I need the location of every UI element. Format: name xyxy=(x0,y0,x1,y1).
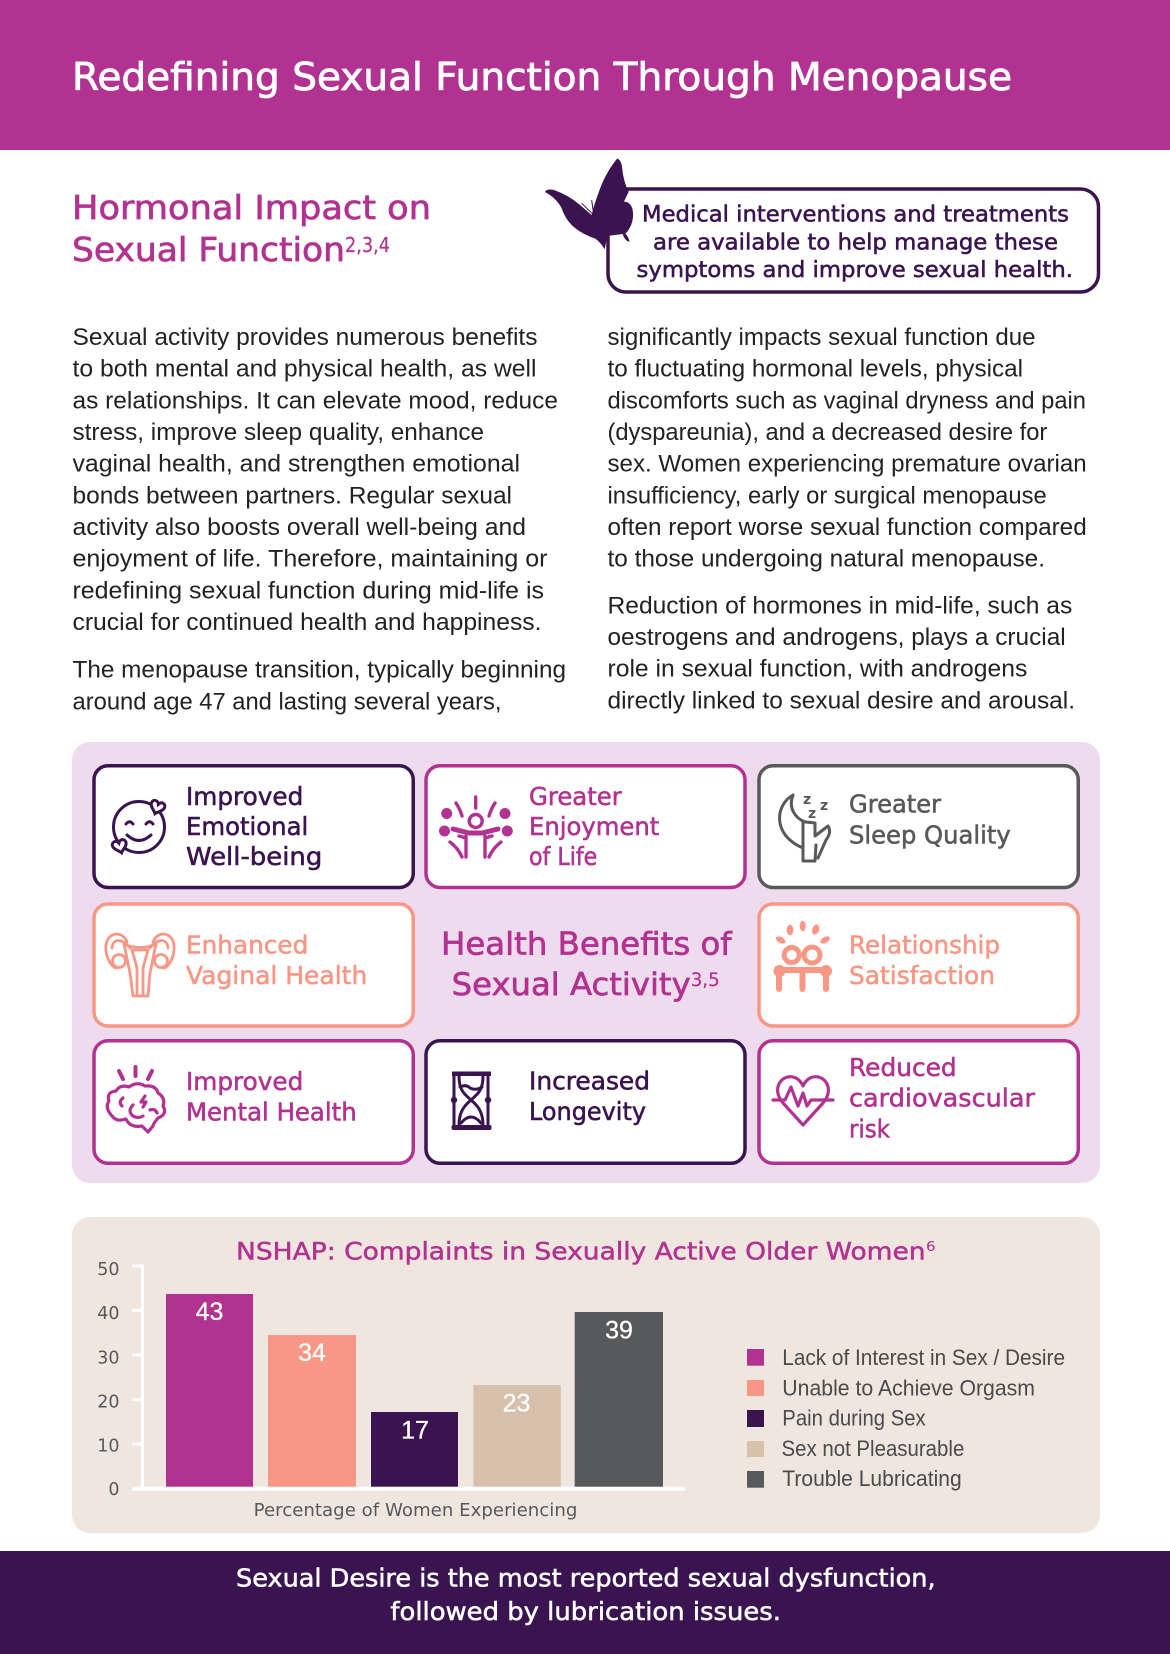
bar: unable to achieve orgasm 34 xyxy=(268,1335,356,1487)
text block: left column: Sexual activity provides numerous benefits xyxy=(72,324,538,351)
icon: brain xyxy=(107,1067,165,1132)
bar chart xyxy=(97,1260,685,1521)
card: reduced cardiovascular risk xyxy=(759,1041,1078,1163)
text block: left column: vaginal health, and strengthen emotional xyxy=(72,451,520,478)
text block: left column xyxy=(72,324,566,715)
bar: trouble lubricating 39 xyxy=(575,1312,663,1487)
heading: health benefits xyxy=(441,926,733,1003)
card text xyxy=(529,782,660,871)
card text xyxy=(186,930,367,990)
card text: Vaginal Health xyxy=(186,961,367,990)
callout text: are available to help manage these xyxy=(653,230,1058,256)
text block: right column: discomforts such as vaginal dryness and pain xyxy=(608,387,1086,414)
icon: heart with pulse xyxy=(773,1077,833,1125)
card text: Enjoyment xyxy=(529,812,660,841)
icon: uterus xyxy=(106,934,174,996)
card text: risk xyxy=(849,1114,891,1143)
card: enhanced vaginal health xyxy=(94,904,413,1026)
heading: hormonal impact: 2,3,4 xyxy=(345,233,390,257)
card: improved mental health xyxy=(94,1041,413,1163)
heading: health benefits: Sexual Activity xyxy=(452,967,691,1003)
panel: NSHAP chart xyxy=(72,1217,1100,1533)
icon: butterfly xyxy=(545,158,633,249)
icon: moon and sleeping hand: z xyxy=(820,798,828,814)
text block: right column: significantly impacts sexual function due xyxy=(608,324,1036,351)
footer banner xyxy=(0,1551,1170,1654)
text block: right column: Reduction of hormones in mid-life, such as xyxy=(608,592,1072,619)
bar: pain during sex 17: 17 xyxy=(401,1417,429,1445)
icon: moon and sleeping hand: z xyxy=(808,806,816,822)
text block: left column: stress, improve sleep quality, enhance xyxy=(72,419,484,446)
card text: Relationship xyxy=(849,930,1000,959)
legend: Pain during Sex xyxy=(782,1406,926,1431)
card text: Reduced xyxy=(849,1053,957,1082)
heading: health benefits: 3,5 xyxy=(691,969,720,991)
icon: joyful person xyxy=(439,797,513,857)
heading: hormonal impact xyxy=(72,188,431,269)
text block: left column: enjoyment of life. Therefore, maintaining or xyxy=(72,546,548,573)
y axis labels: 20 xyxy=(97,1392,120,1412)
card text: Sleep Quality xyxy=(849,820,1011,849)
text block: left column: to both mental and physical health, as well xyxy=(72,356,536,383)
text block: right column: sex. Women experiencing premature ovarian xyxy=(608,451,1087,478)
card text: Mental Health xyxy=(186,1097,357,1126)
text block: right column: (dyspareunia), and a decreased desire for xyxy=(608,419,1047,446)
text block: right column xyxy=(608,324,1087,714)
y axis labels xyxy=(97,1260,120,1500)
legend: Sex not Pleasurable xyxy=(782,1436,964,1461)
bar: lack of interest 43 xyxy=(166,1294,253,1487)
text block: left column: as relationships. It can elevate mood, reduce xyxy=(72,387,558,414)
chart title: NSHAP: Complaints in Sexually Active Older Women xyxy=(236,1237,926,1265)
title: Redefining Sexual Function Through Menopause xyxy=(72,55,1012,99)
y axis labels: 10 xyxy=(97,1437,120,1457)
bar: unable to achieve orgasm 34: 34 xyxy=(298,1339,326,1367)
panel: health benefits xyxy=(72,742,1100,1183)
card: greater sleep quality xyxy=(759,766,1078,888)
text block: left column: activity also boosts overall well-being and xyxy=(72,514,526,541)
card text: Satisfaction xyxy=(849,961,995,990)
chart title: 6 xyxy=(926,1240,936,1255)
bar: lack of interest 43: 43 xyxy=(196,1298,223,1326)
text block: left column: redefining sexual function during mid-life is xyxy=(72,577,544,604)
legend xyxy=(747,1345,1065,1491)
card text xyxy=(849,789,1011,849)
y axis labels: 40 xyxy=(97,1304,120,1324)
card text: Greater xyxy=(529,782,623,811)
y axis labels: 0 xyxy=(108,1480,120,1500)
icon: smiling face with hearts xyxy=(112,799,166,855)
legend: Trouble Lubricating xyxy=(782,1466,962,1491)
icon: couple xyxy=(774,921,832,989)
card: relationship satisfaction xyxy=(759,904,1078,1026)
icon: moon and sleeping hand xyxy=(780,792,830,861)
legend: Lack of Interest in Sex / Desire xyxy=(782,1345,1065,1370)
text block: right column: role in sexual function, with androgens xyxy=(608,656,1027,683)
axes xyxy=(132,1264,685,1491)
text block: right column: directly linked to sexual desire and arousal. xyxy=(608,687,1075,714)
card text xyxy=(186,1067,357,1126)
card text: of Life xyxy=(529,842,597,871)
y axis labels: 30 xyxy=(97,1348,120,1368)
footer text xyxy=(236,1564,936,1626)
card text: Improved xyxy=(186,782,303,811)
bar: trouble lubricating 39: 39 xyxy=(605,1316,633,1344)
bar: sex not pleasurable 23: 23 xyxy=(503,1390,530,1418)
text block: left column: around age 47 and lasting several years, xyxy=(72,688,502,715)
card text xyxy=(849,930,1000,990)
heading: hormonal impact: Hormonal Impact on xyxy=(72,188,431,227)
text block: right column: to fluctuating hormonal levels, physical xyxy=(608,356,1023,383)
card: improved emotional well-being xyxy=(94,766,413,888)
header banner xyxy=(0,0,1170,150)
text block: left column: bonds between partners. Regular sexual xyxy=(72,482,512,509)
card text: Greater xyxy=(849,789,942,818)
card text: Well-being xyxy=(186,842,322,871)
text block: right column: to those undergoing natural menopause. xyxy=(608,546,1045,573)
callout text: symptoms and improve sexual health. xyxy=(636,258,1073,283)
callout: medical interventions xyxy=(545,158,1098,292)
card text xyxy=(186,782,322,871)
card: increased longevity xyxy=(426,1041,745,1163)
y axis labels: 50 xyxy=(97,1260,120,1280)
footer text: followed by lubrication issues. xyxy=(390,1597,781,1626)
icon: moon and sleeping hand: z xyxy=(803,792,811,808)
callout text xyxy=(636,202,1073,283)
bar: sex not pleasurable 23 xyxy=(473,1385,561,1487)
card text: cardiovascular xyxy=(849,1084,1036,1113)
card text xyxy=(529,1066,650,1126)
heading: hormonal impact: Sexual Function xyxy=(72,230,345,269)
icon: hourglass xyxy=(451,1072,492,1130)
card text: Emotional xyxy=(186,812,308,841)
legend: Unable to Achieve Orgasm xyxy=(782,1376,1035,1401)
bar: pain during sex 17 xyxy=(371,1412,458,1487)
card text: Longevity xyxy=(529,1097,646,1126)
card text: Increased xyxy=(529,1066,650,1095)
text block: right column: insufficiency, early or surgical menopause xyxy=(608,482,1047,509)
text block: left column: crucial for continued health and happiness. xyxy=(72,609,542,636)
card text xyxy=(849,1053,1036,1143)
callout text: Medical interventions and treatments xyxy=(642,202,1069,228)
x axis label: Percentage of Women Experiencing xyxy=(254,1501,577,1521)
card text: Improved xyxy=(186,1067,303,1096)
footer text: Sexual Desire is the most reported sexual dysfunction, xyxy=(236,1564,936,1593)
text block: right column: oestrogens and androgens, plays a crucial xyxy=(608,624,1066,651)
card: greater enjoyment of life xyxy=(426,766,745,888)
card text: Enhanced xyxy=(186,930,308,959)
text block: left column: The menopause transition, typically beginning xyxy=(72,657,566,684)
text block: right column: often report worse sexual function compared xyxy=(608,514,1087,541)
heading: health benefits: Health Benefits of xyxy=(441,926,733,962)
